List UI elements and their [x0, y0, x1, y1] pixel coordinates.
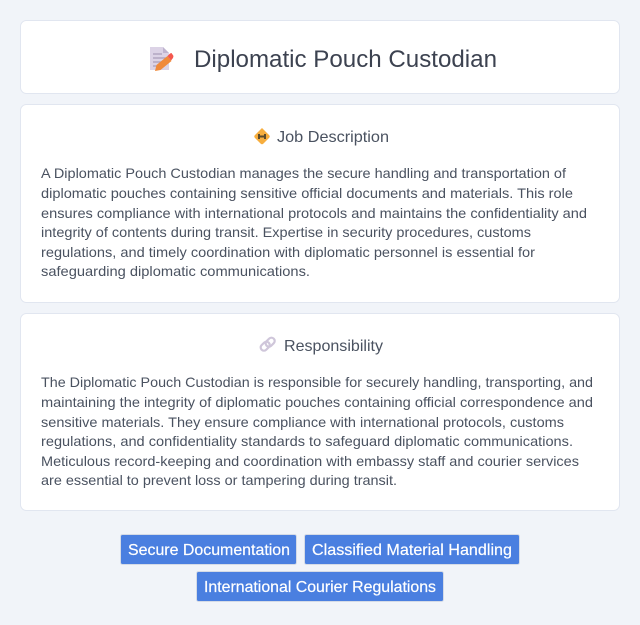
text block: responsibility: The Diplomatic Pouch Custodian is responsible for securely handling, transporting, and: [41, 374, 593, 390]
text block: responsibility: sensitive materials. They ensure compliance with international protocols, customs: [41, 414, 564, 430]
icon: document with pencil: [150, 47, 174, 71]
tag: secure documentation: Secure Documentation: [128, 542, 290, 559]
icon: diamond road sign: [254, 128, 270, 144]
tag: secure documentation: [120, 534, 296, 564]
panel: job description: [20, 104, 620, 302]
tag: international courier regulations: [196, 572, 444, 602]
heading: responsibility: Responsibility: [284, 338, 383, 355]
panel: responsibility: [20, 314, 620, 510]
text block: responsibility: maintaining the integrity of diplomatic pouches containing official correspondence and: [41, 394, 593, 410]
heading: job description: Job Description: [277, 129, 389, 146]
text block: responsibility: are essential to prevent loss or tampering during transit.: [41, 472, 397, 488]
title text: Diplomatic Pouch Custodian: [194, 46, 497, 73]
tag: classified material handling: [304, 534, 520, 564]
text block: responsibility: regulations, and confidentiality standards to safeguard diplomatic communications.: [41, 433, 573, 449]
text block: job description: diplomatic pouches containing sensitive official documents and materials. This role: [41, 185, 573, 201]
text block: job description: safeguarding diplomatic communications.: [41, 263, 310, 279]
text block: job description: A Diplomatic Pouch Custodian manages the secure handling and transportation of: [41, 165, 566, 181]
text block: responsibility: Meticulous record-keeping and coordination with embassy staff and courier services: [41, 453, 579, 469]
text block: job description: ensures compliance with international protocols and maintains the confidentiality and: [41, 205, 587, 221]
text block: job description: integrity of contents during transit. Expertise in security procedures, customs: [41, 224, 531, 240]
text block: job description: regulations, and timely coordination with diplomatic personnel is essential for: [41, 244, 535, 260]
tag: classified material handling: Classified Material Handling: [312, 542, 512, 559]
panel: title: [20, 20, 620, 94]
text block: job description: [41, 165, 587, 279]
tag: international courier regulations: International Courier Regulations: [204, 579, 436, 596]
icon: chain link: [259, 336, 276, 352]
text block: responsibility: [41, 374, 593, 488]
